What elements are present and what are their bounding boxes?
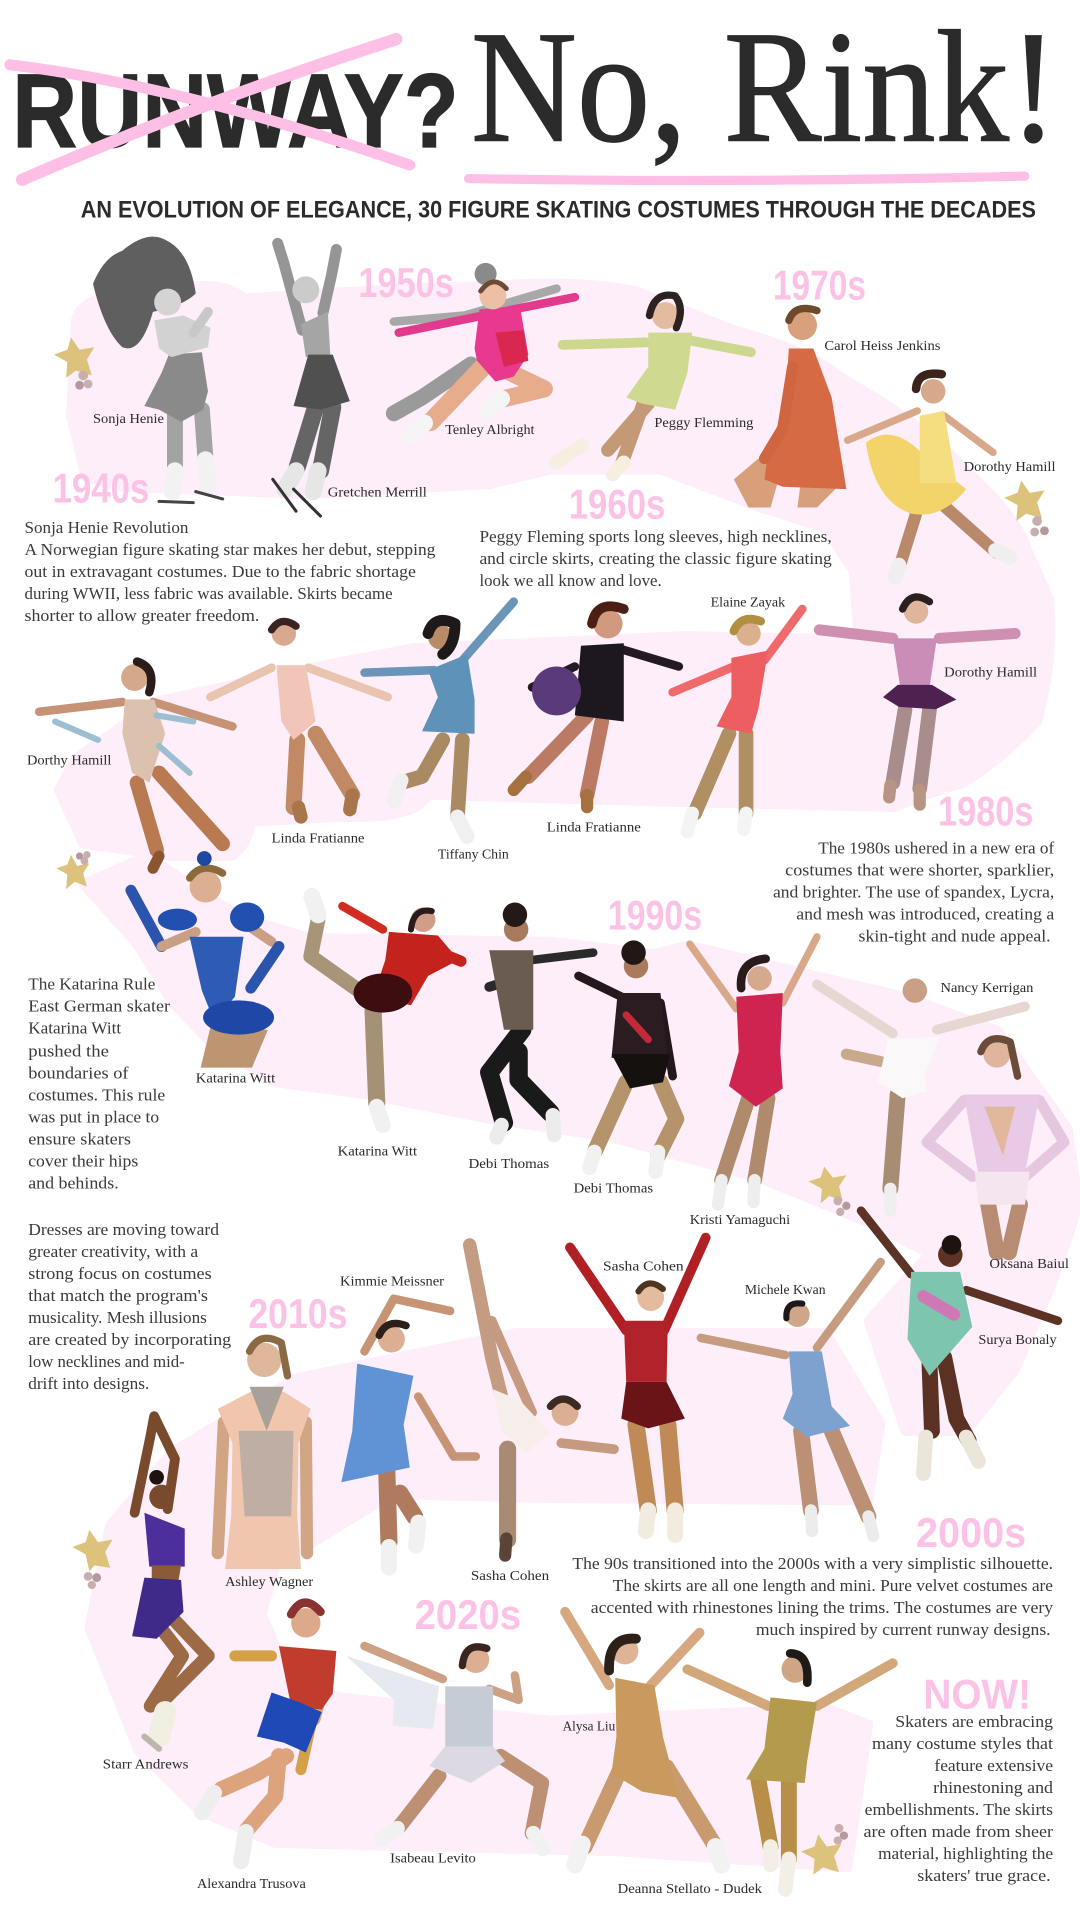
decade label 2010s: 2010s	[248, 1290, 347, 1337]
text block: The Katarina Rule: costumes. This rule	[28, 1086, 165, 1105]
figure: Oksana Baiul	[927, 1039, 1064, 1252]
text block: 2000s: much inspired by current runway designs.	[756, 1620, 1051, 1639]
name: Tiffany Chin: Tiffany Chin	[438, 846, 509, 861]
figure: Debi Thomas black catsuit	[489, 903, 593, 1137]
text block: The Katarina Rule: The Katarina Rule	[28, 974, 155, 993]
text block: 2010s dresses	[28, 1220, 232, 1393]
text block: 2010s dresses: drift into designs.	[28, 1374, 149, 1393]
name: Isabeau Levito: Isabeau Levito	[390, 1851, 476, 1866]
figure: Linda Fratianne peach	[210, 621, 388, 817]
text block: Sonja Henie Revolution: Sonja Henie Revolution	[25, 518, 189, 537]
figure: Debi Thomas red and black	[579, 940, 676, 1172]
text block: 1980s	[773, 839, 1055, 946]
name: Tenley Albright: Tenley Albright	[445, 422, 535, 437]
text block: Now	[863, 1712, 1054, 1885]
text block: The Katarina Rule: East German skater	[28, 996, 170, 1015]
decade label 1950s: 1950s	[358, 259, 454, 306]
text block: 1960s Peggy Fleming: look we all know and love.	[479, 571, 662, 590]
text block: Sonja Henie Revolution: A Norwegian figure skating star makes her debut, stepping	[25, 540, 436, 559]
text block: 1960s Peggy Fleming: and circle skirts, creating the classic figure skating	[479, 549, 832, 568]
text block: The Katarina Rule: cover their hips	[28, 1152, 138, 1171]
figure: Alysa Liu	[565, 1612, 722, 1865]
name: Katarina Witt blue: Katarina Witt	[196, 1070, 275, 1085]
name: Dorothy Hamill purple: Dorothy Hamill	[944, 664, 1037, 679]
text block: 1980s: and mesh was introduced, creating a	[796, 905, 1055, 924]
decade label 2020s: 2020s	[415, 1591, 521, 1638]
text block: 1980s: costumes that were shorter, sparklier,	[785, 861, 1054, 880]
figure: Surya Bonaly	[861, 1211, 1058, 1474]
figure: Linda Fratianne black	[514, 606, 679, 807]
decade label NOW!: NOW!	[923, 1670, 1031, 1717]
figure: Elaine Zayak	[673, 609, 802, 832]
text block: 2000s: The 90s transitioned into the 2000s with a very simplistic silhouette.	[572, 1554, 1053, 1573]
figure: Katarina Witt blue	[131, 851, 279, 1068]
text block: Now: rhinestoning and	[933, 1778, 1054, 1797]
text block: The Katarina Rule	[28, 974, 170, 1193]
text block: Sonja Henie Revolution	[25, 518, 436, 625]
text block: 2000s: accented with rhinestones lining the trims. The costumes are very	[591, 1598, 1054, 1617]
text block: 2010s dresses: Dresses are moving toward	[28, 1220, 220, 1239]
text block: Now: feature extensive	[934, 1756, 1053, 1775]
text block: Now: are often made from sheer	[863, 1822, 1053, 1841]
figure: Dorthy Hamill	[39, 662, 232, 868]
decade label 1980s: 1980s	[938, 787, 1033, 834]
name: Sasha Cohen white: Sasha Cohen	[471, 1568, 549, 1583]
name: Linda Fratianne peach: Linda Fratianne	[272, 831, 365, 846]
figure: Sasha Cohen red	[570, 1238, 706, 1535]
name: Peggy Flemming: Peggy Flemming	[654, 415, 754, 430]
figure: Alexandra Trusova	[202, 1603, 336, 1861]
name: Linda Fratianne black: Linda Fratianne	[547, 820, 641, 835]
text block: The Katarina Rule: Katarina Witt	[28, 1018, 121, 1037]
text block: Now: material, highlighting the	[878, 1844, 1053, 1863]
name: Dorthy Hamill: Dorthy Hamill	[27, 752, 112, 767]
figure: Ashley Wagner	[218, 1338, 311, 1569]
text block: Now: skaters' true grace.	[917, 1866, 1051, 1885]
figure: Nancy Kerrigan	[817, 978, 1025, 1211]
text block: 2010s dresses: are created by incorporating	[28, 1330, 232, 1349]
name: Alysa Liu: Alysa Liu	[563, 1718, 615, 1733]
figure: Sonja Henie	[93, 237, 223, 503]
figure: Tenley Albright	[394, 263, 575, 435]
name: Katarina Witt red: Katarina Witt	[338, 1144, 417, 1159]
name: Elaine Zayak: Elaine Zayak	[711, 595, 785, 610]
text block: 2010s dresses: greater creativity, with a	[28, 1242, 199, 1261]
text block: Now: Skaters are embracing	[895, 1712, 1054, 1731]
figure: Isabeau Levito	[346, 1646, 543, 1849]
figure: Tiffany Chin	[365, 602, 514, 836]
text block: 2000s	[572, 1554, 1054, 1639]
name: Deanna Stellato-Dudek: Deanna Stellato - Dudek	[618, 1881, 762, 1896]
text block: 1960s Peggy Fleming	[479, 527, 832, 590]
figure: Kimmie Meissner	[341, 1299, 476, 1568]
figure: Starr Andrews	[132, 1416, 208, 1749]
decade label 1990s: 1990s	[608, 891, 702, 938]
title: Runway crossed out: RUNWAY?	[12, 53, 459, 170]
name: Debi Thomas red and black: Debi Thomas	[574, 1180, 653, 1195]
name: Alexandra Trusova: Alexandra Trusova	[197, 1876, 306, 1891]
icon: gold star with gems 6	[801, 1824, 848, 1875]
name: Sonja Henie: Sonja Henie	[93, 411, 164, 426]
icon: gold star with gems 3	[56, 851, 91, 889]
text block: Now: embellishments. The skirts	[865, 1800, 1053, 1819]
text block: 1980s: and brighter. The use of spandex, Lycra,	[773, 883, 1054, 902]
text block: Sonja Henie Revolution: shorter to allow greater freedom.	[25, 606, 259, 625]
figure: Michele Kwan	[701, 1262, 881, 1536]
text block: Sonja Henie Revolution: during WWII, less fabric was available. Skirts became	[25, 584, 393, 603]
figure: Dorothy Hamill yellow	[848, 374, 1010, 577]
text block: 2010s dresses: that match the program's	[28, 1286, 208, 1305]
text block: The Katarina Rule: and behinds.	[28, 1174, 119, 1193]
name: Surya Bonaly: Surya Bonaly	[978, 1332, 1057, 1347]
figure: Deanna Stellato-Dudek	[687, 1653, 893, 1889]
name: Gretchen Merrill: Gretchen Merrill	[328, 485, 427, 500]
text block: 2010s dresses: low necklines and mid-	[28, 1352, 185, 1371]
name: Carol Heiss Jenkins: Carol Heiss Jenkins	[824, 338, 941, 353]
name: Dorothy Hamill yellow: Dorothy Hamill	[964, 459, 1056, 474]
figure: Dorothy Hamill purple	[819, 597, 1015, 805]
figure: Sasha Cohen white	[470, 1245, 614, 1556]
figure: Carol Heiss Jenkins	[734, 308, 846, 508]
text block: 1980s: The 1980s ushered in a new era of	[818, 839, 1055, 858]
name: Kimmie Meissner: Kimmie Meissner	[340, 1273, 444, 1288]
name: Sasha Cohen red: Sasha Cohen	[603, 1259, 684, 1274]
decade label 1960s: 1960s	[569, 481, 665, 528]
name: Kristi Yamaguchi: Kristi Yamaguchi	[690, 1212, 790, 1227]
text block: Sonja Henie Revolution: out in extravagant costumes. Due to the fabric shortage	[25, 562, 416, 581]
icon: gold star with gems 2	[1004, 481, 1049, 536]
text block: The Katarina Rule: was put in place to	[28, 1108, 159, 1127]
text block: The Katarina Rule: boundaries of	[28, 1064, 129, 1083]
text block: 2010s dresses: musicality. Mesh illusions	[28, 1308, 207, 1327]
decade label 1940s: 1940s	[53, 465, 149, 512]
decade label 1970s: 1970s	[773, 262, 866, 309]
text block: The Katarina Rule: pushed the	[28, 1042, 109, 1061]
name: Nancy Kerrigan: Nancy Kerrigan	[941, 980, 1034, 995]
text block: 2000s: The skirts are all one length and mini. Pure velvet costumes are	[613, 1576, 1053, 1595]
text block: 1980s: skin-tight and nude appeal.	[859, 927, 1051, 946]
name: Starr Andrews: Starr Andrews	[103, 1756, 188, 1771]
text block: The Katarina Rule: ensure skaters	[28, 1130, 131, 1149]
text block: Now: many costume styles that	[872, 1734, 1053, 1753]
icon: gold star with gems 4	[808, 1167, 851, 1216]
figure: Peggy Flemming	[557, 295, 751, 474]
icon: gold star with gems 1	[54, 338, 94, 390]
name: Ashley Wagner: Ashley Wagner	[225, 1574, 314, 1589]
text block: 2010s dresses: strong focus on costumes	[28, 1264, 212, 1283]
name: Michele Kwan: Michele Kwan	[745, 1282, 826, 1297]
figure: Katarina Witt red	[311, 896, 461, 1125]
name: Debi Thomas black catsuit: Debi Thomas	[468, 1156, 549, 1171]
figure: Kristi Yamaguchi	[690, 937, 817, 1205]
text block: 1960s Peggy Fleming: Peggy Fleming sports long sleeves, high necklines,	[479, 527, 832, 546]
name: Oksana Baiul: Oksana Baiul	[989, 1256, 1069, 1271]
icon: gold star with gems 5	[72, 1530, 113, 1589]
decade label 2000s: 2000s	[916, 1509, 1026, 1556]
pink brush background	[59, 283, 1079, 1867]
figure: Gretchen Merrill	[273, 243, 350, 516]
